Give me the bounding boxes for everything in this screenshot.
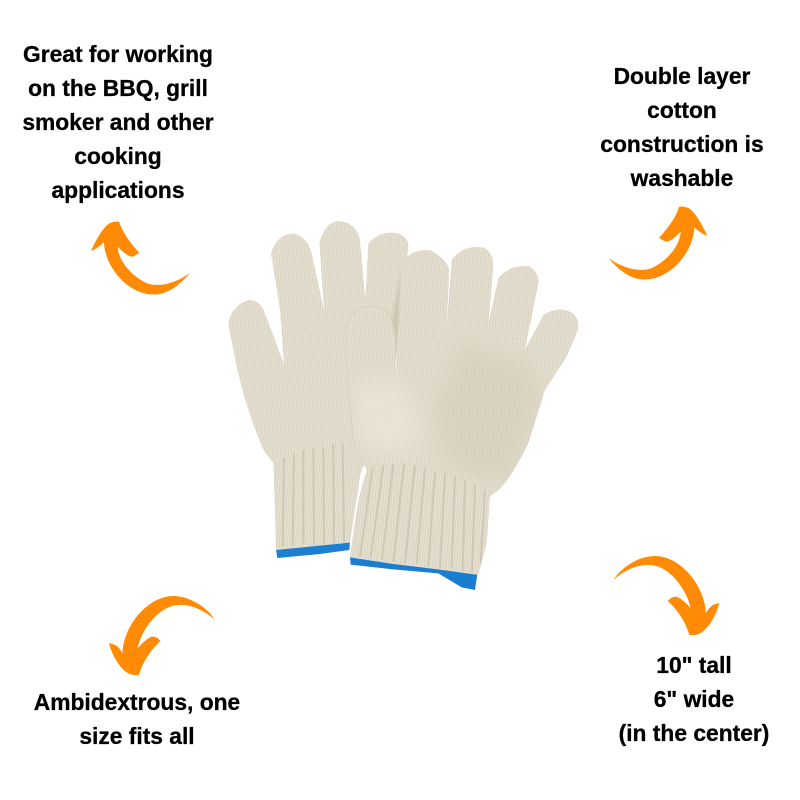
front glove shading — [353, 343, 540, 480]
text: ambidextrous one size: size fits all — [79, 723, 195, 749]
back glove cuff ribs — [283, 443, 344, 546]
text: glove dimensions: 10" tall — [656, 652, 732, 678]
text: ambidextrous one size — [34, 689, 240, 749]
text: glove dimensions — [619, 652, 769, 746]
text: glove dimensions: (in the center) — [619, 720, 769, 746]
text: double layer cotton: cotton — [647, 97, 717, 123]
text: double layer cotton — [600, 63, 764, 191]
illustration: pair of knitted gloves — [228, 221, 578, 590]
front glove cuff ribs — [360, 463, 485, 572]
text: BBQ and grill use: applications — [51, 177, 184, 203]
text: BBQ and grill use: Great for working — [23, 41, 213, 67]
front glove — [346, 247, 578, 590]
arrow: top right pointing up to text — [608, 206, 708, 280]
text: ambidextrous one size: Ambidextrous, one — [34, 689, 240, 715]
text: double layer cotton: construction is — [600, 131, 764, 157]
text: BBQ and grill use: smoker and other — [22, 109, 214, 135]
arrow: bottom left pointing down to text — [109, 596, 215, 676]
text: double layer cotton: Double layer — [614, 63, 750, 89]
arrow: bottom right pointing down to text — [613, 556, 720, 636]
text: BBQ and grill use: cooking — [74, 143, 162, 169]
back glove — [228, 221, 408, 558]
arrow: top left pointing up to text — [91, 222, 190, 294]
text: BBQ and grill use: on the BBQ, grill — [28, 75, 208, 101]
text: glove dimensions: 6" wide — [654, 686, 734, 712]
text: BBQ and grill use — [22, 41, 214, 204]
text: double layer cotton: washable — [631, 165, 733, 191]
